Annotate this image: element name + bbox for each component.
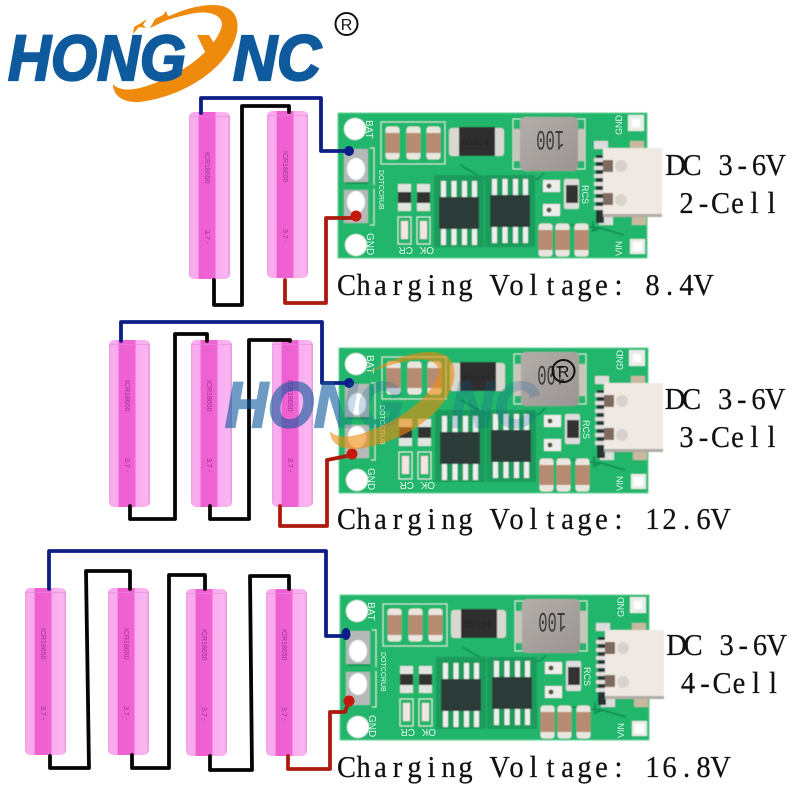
battery 2: ICR18650 (281, 151, 288, 183)
input label 2 (665, 382, 786, 454)
charger board 1 (338, 113, 662, 258)
charger board 1: RCS (580, 185, 590, 204)
battery 2 (267, 111, 308, 278)
red negative wire (288, 701, 349, 769)
battery 4: 3.7 - (280, 707, 287, 722)
logo text HONG: HONG (8, 22, 186, 94)
charger board 2: 100 (537, 357, 565, 390)
input label 2: 3-Cell (679, 420, 775, 454)
charger board 2: CR (400, 479, 414, 490)
blue positive wire (201, 98, 349, 151)
charger board 1: VIN (614, 241, 624, 256)
input label 1 (665, 148, 786, 220)
row 2: 3-cell circuit (109, 322, 786, 536)
red negative wire (280, 455, 352, 526)
charger board 2: VIN (615, 476, 625, 491)
input label 3: 4-Cell (681, 666, 777, 700)
charger board 3: GND (366, 715, 377, 737)
input label 1: DC 3-6V (665, 148, 786, 182)
black link wire 2 (132, 575, 205, 768)
charger board 3: 100 (538, 604, 566, 637)
charger board 1: 100 (536, 122, 564, 155)
blue terminal dot (344, 378, 354, 388)
battery 4: ICR18650 (280, 629, 287, 661)
row 3: 4-cell circuit (25, 551, 787, 784)
registered mark (336, 13, 358, 35)
charger board 1: GND (614, 114, 624, 135)
blue positive wire (49, 551, 345, 636)
logo Y arm (197, 35, 217, 58)
watermark: faded brand logo: R (558, 364, 569, 381)
red terminal dot (344, 696, 354, 706)
battery 1: 3.7 - (123, 458, 130, 473)
blue positive wire (121, 322, 349, 383)
charger board 3: CR (401, 726, 415, 737)
black link wire 3 (210, 576, 289, 770)
battery 1: ICR18650 (39, 628, 46, 660)
charger board 2 (339, 348, 663, 493)
charger board 3: DOTCCRUB (379, 652, 386, 692)
charger board 3: OK (421, 726, 436, 737)
charger board 3: BAT (365, 602, 376, 621)
input label 3 (666, 628, 787, 700)
battery 2: ICR18650 (205, 380, 212, 412)
charger board 1: OK (419, 244, 434, 255)
battery 1: 3.7 - (203, 230, 210, 245)
red terminal dot (350, 210, 362, 222)
battery 1: ICR18650 (123, 380, 130, 412)
charger board 1: DOTCCRUB (377, 170, 384, 210)
red negative wire (285, 218, 356, 303)
watermark: faded brand logo (225, 352, 574, 449)
charging voltage label 3: Charging Voltage: 16.8V (337, 750, 731, 784)
row 1: 2-cell circuit (189, 98, 786, 305)
watermark: faded brand logo: NC (450, 369, 539, 441)
logo text NC: NC (233, 22, 322, 94)
battery 2 (191, 340, 232, 507)
black link wire 1 (130, 334, 207, 519)
battery 3 (186, 589, 227, 756)
charger board 1: CR (399, 244, 413, 255)
battery 3: ICR18650 (286, 380, 293, 412)
logo stars (133, 11, 176, 34)
charger board 3 (340, 595, 664, 740)
blue terminal dot (342, 628, 350, 640)
logo swoosh (113, 5, 238, 102)
battery 1: 3.7 - (39, 706, 46, 721)
charger board 2: HSS34 (463, 373, 490, 383)
charger board 1: HSS34 (462, 138, 489, 148)
battery 2: 3.7 - (281, 229, 288, 244)
input label 1: 2-Cell (679, 186, 775, 220)
battery 1: ICR18650 (203, 152, 210, 184)
battery 2 (108, 588, 149, 755)
charger board 3: RCS (582, 667, 592, 686)
blue terminal dot (344, 146, 354, 156)
charging voltage label 1: Charging Voltage: 8.4V (337, 268, 714, 302)
charger board 3: GND (616, 596, 626, 617)
charger board 2: RCS (581, 420, 591, 439)
watermark: faded brand logo: HONG (225, 369, 403, 441)
charger board 2: BAT (364, 355, 375, 374)
battery 2: ICR18650 (122, 628, 129, 660)
charger board 3: HSS34 (464, 620, 491, 630)
battery 3 (272, 340, 313, 507)
charger board 2: GND (365, 468, 376, 490)
battery 3: 3.7 - (200, 707, 207, 722)
charging voltage label 2: Charging Voltage: 12.6V (337, 502, 731, 536)
battery 1 (189, 112, 230, 279)
charger board 2: DOTCCRUB (378, 405, 385, 445)
registered mark: R (341, 17, 352, 34)
battery 2: 3.7 - (122, 706, 129, 721)
charger board 2: GND (615, 350, 625, 370)
battery 1 (109, 340, 150, 507)
input label 2: DC 3-6V (665, 382, 786, 416)
black link wire (214, 106, 289, 305)
battery 2: 3.7 - (205, 458, 212, 473)
input label 3: DC 3-6V (666, 628, 787, 662)
black link wire 2 (210, 340, 290, 519)
charger board 2: OK (420, 479, 435, 490)
charger board 1: BAT (363, 120, 374, 139)
charger board 3: VIN (616, 723, 626, 738)
red terminal dot (346, 448, 358, 460)
battery 3: 3.7 - (286, 458, 293, 473)
battery 1 (25, 588, 66, 755)
watermark: faded brand logo: HONG (225, 369, 403, 441)
battery 3: ICR18650 (200, 629, 207, 661)
black link wire 1 (50, 571, 130, 768)
logo: Hongync brand mark (8, 5, 358, 102)
charger board 1: GND (364, 233, 375, 255)
battery 4 (266, 589, 307, 756)
